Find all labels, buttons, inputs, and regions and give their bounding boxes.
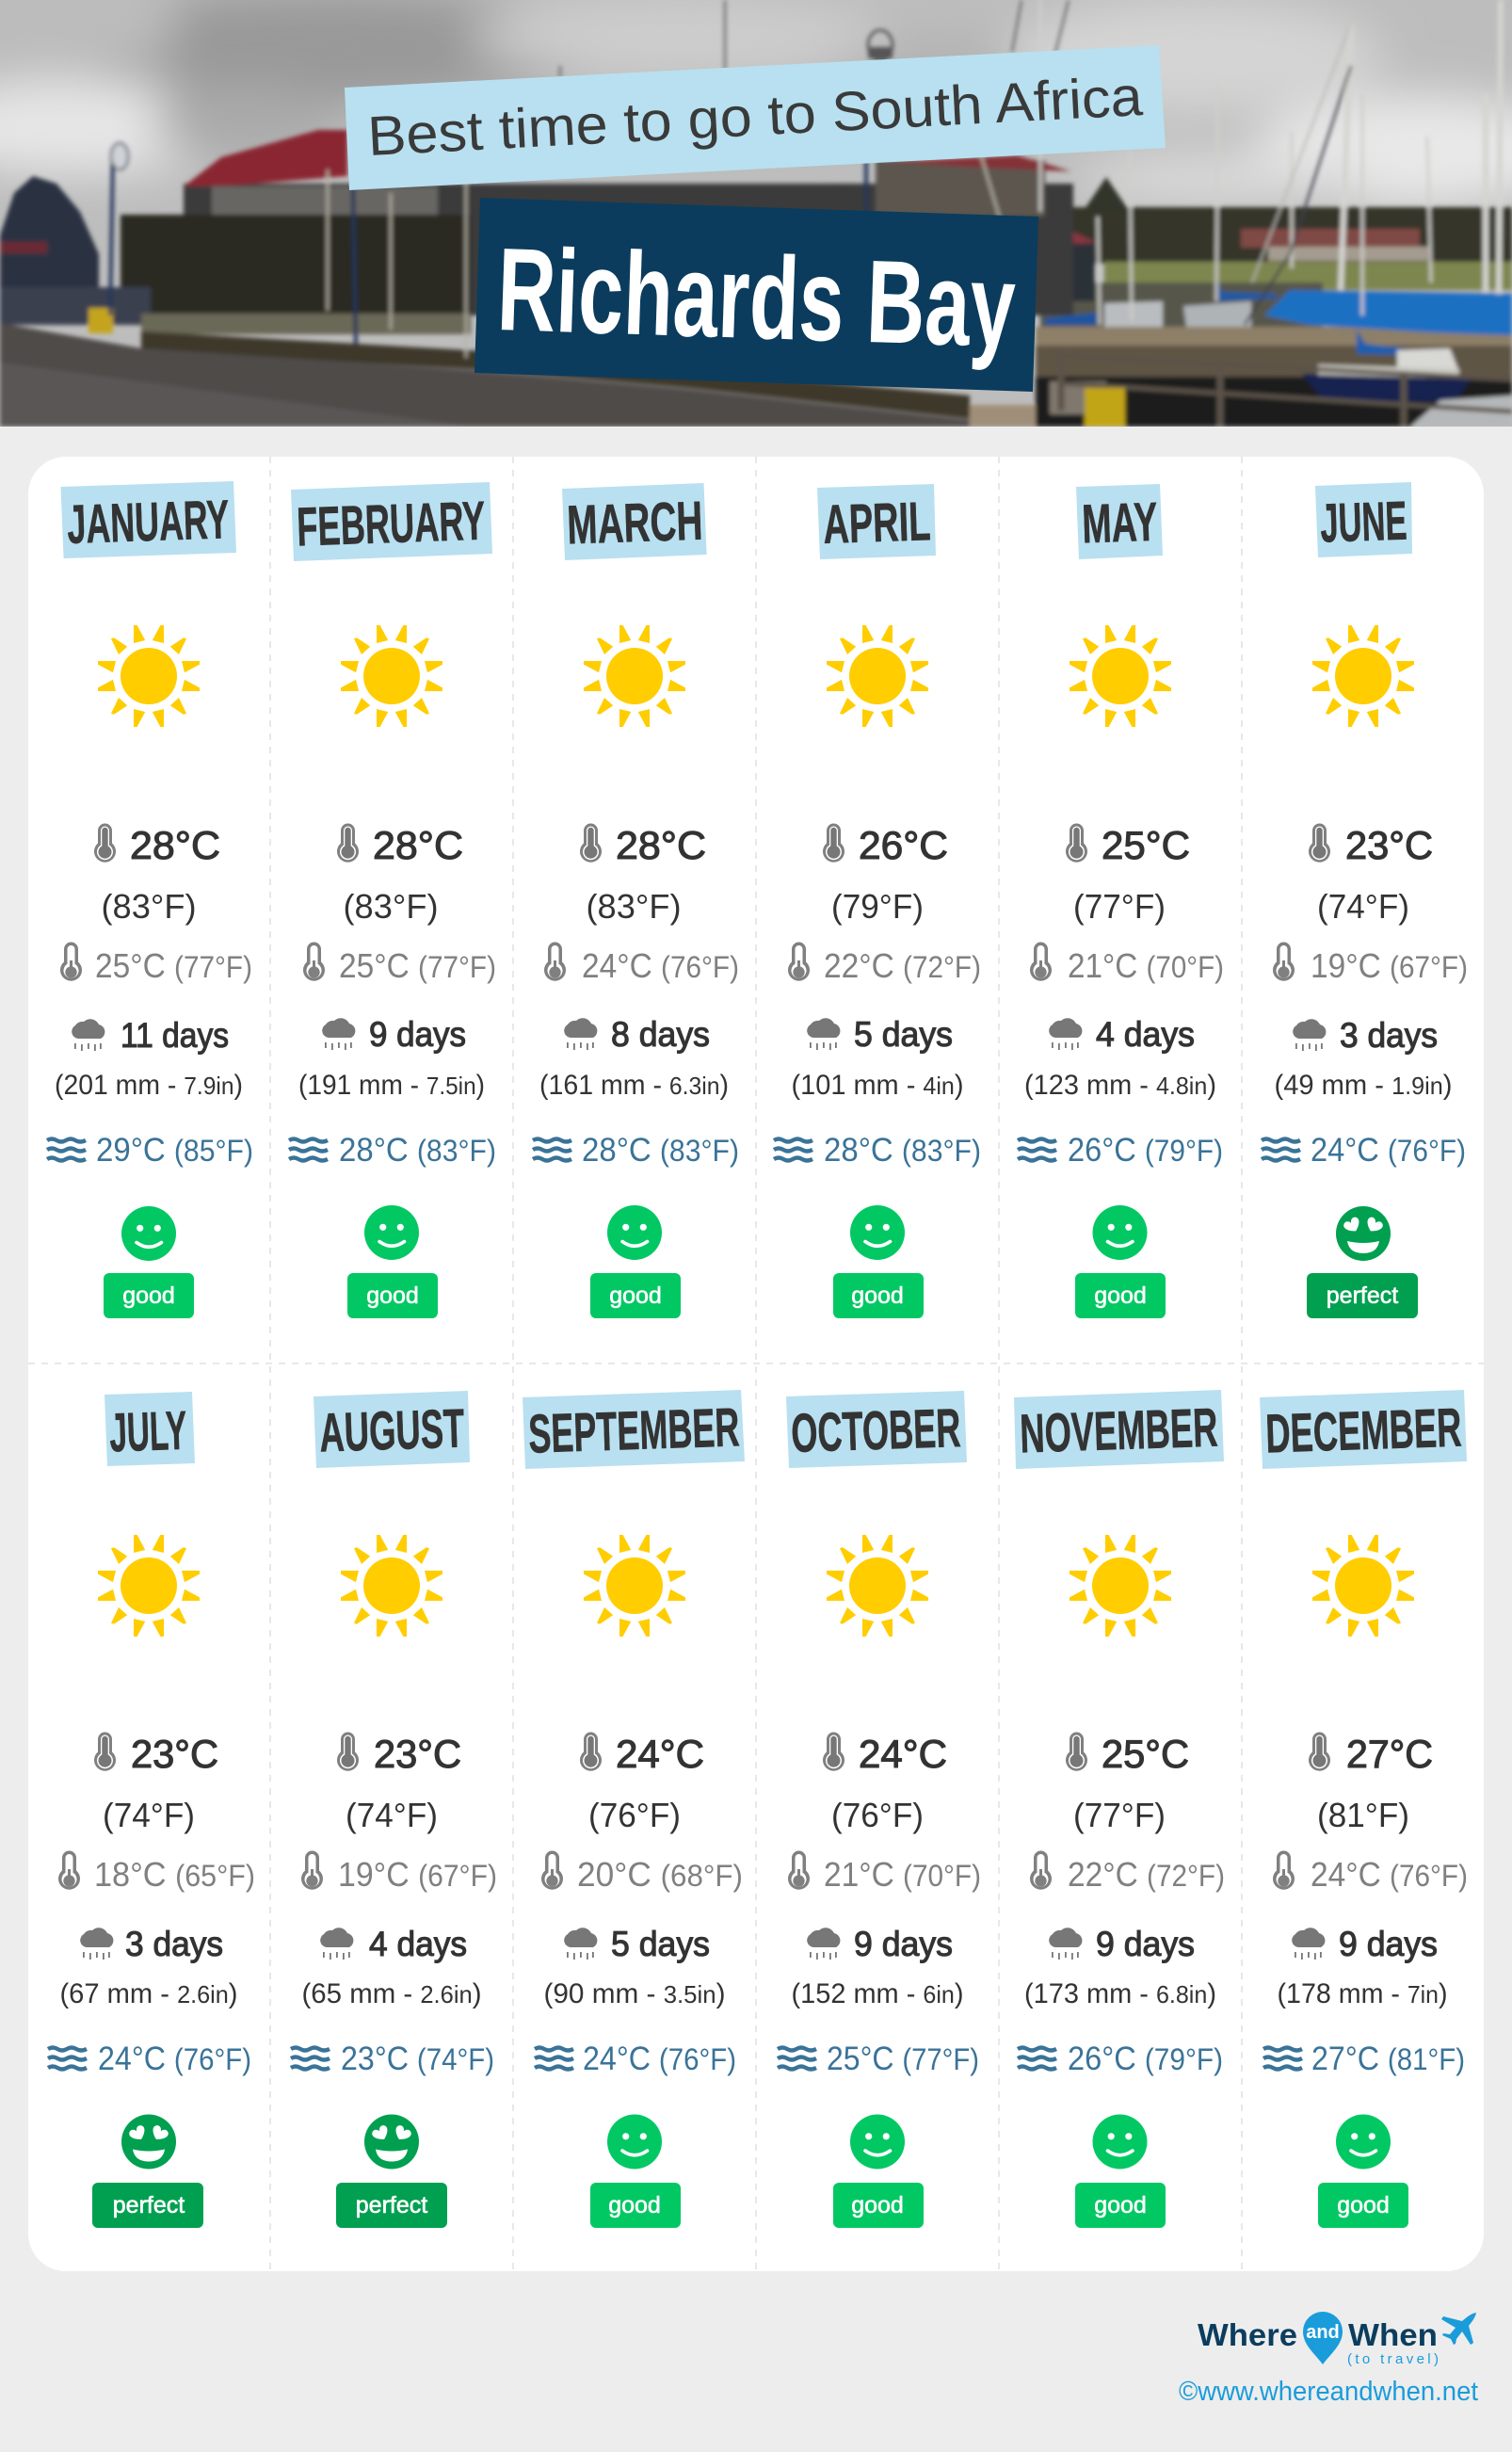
small pavilion <box>1070 243 1098 303</box>
max temperature fahrenheit: (79°F) <box>831 887 924 926</box>
month title <box>786 1391 967 1468</box>
month title: JANUARY <box>66 489 230 556</box>
min temperature: 22°C (72°F) <box>1068 1855 1225 1894</box>
icon: sun <box>584 625 685 727</box>
sea temperature: 24°C (76°F) <box>98 2041 251 2077</box>
fence and walkway <box>141 314 471 334</box>
rating: good: good <box>366 1282 419 1309</box>
sea temperature: 25°C (77°F) <box>827 2041 979 2077</box>
dock railing <box>1061 356 1512 411</box>
rainfall: (67 mm - 2.6in) <box>59 1978 237 2009</box>
rating: perfect: perfect <box>356 2192 427 2218</box>
rating: perfect <box>92 2115 203 2228</box>
yellow bins <box>88 308 113 333</box>
rain days <box>1293 1016 1438 1055</box>
max temperature: 27°C <box>1346 1732 1433 1776</box>
rating: good <box>104 1206 194 1318</box>
max temperature fahrenheit: (74°F) <box>1317 887 1409 926</box>
rating: good: good <box>1094 2192 1147 2218</box>
rain days <box>322 1015 466 1054</box>
rainfall: (49 mm - 1.9in) <box>1275 1070 1452 1101</box>
sea temperature: 27°C (81°F) <box>1311 2041 1465 2077</box>
rain days <box>564 1015 710 1054</box>
month: February <box>289 482 496 1318</box>
max temperature fahrenheit: (83°F) <box>586 887 682 926</box>
rain days <box>1292 1925 1438 1963</box>
hero photo: Richards Bay marina <box>0 0 1512 427</box>
sea temperature: 24°C (76°F) <box>583 2041 736 2077</box>
max temperature fahrenheit: (83°F) <box>102 887 196 926</box>
month: June <box>1262 482 1468 1318</box>
road <box>0 323 970 427</box>
rating: good: good <box>122 1282 175 1309</box>
rating: perfect <box>1307 1206 1418 1318</box>
min temperature: 21°C (70°F) <box>1068 946 1224 985</box>
rating: good <box>833 2115 924 2228</box>
calendar panel <box>28 457 1484 2271</box>
rating: good: good <box>851 2192 904 2218</box>
month title: MARCH <box>566 491 703 556</box>
icon: sun <box>1312 625 1414 727</box>
max temperature fahrenheit: (77°F) <box>1073 887 1166 926</box>
rating: perfect: perfect <box>113 2192 185 2218</box>
icon: sun <box>1070 625 1171 727</box>
max temperature <box>1309 1732 1433 1776</box>
sea temperature: 26°C (79°F) <box>1068 2041 1223 2077</box>
max temperature: 24°C <box>616 1732 704 1776</box>
rain days: 9 days <box>854 1925 953 1963</box>
month title <box>1315 482 1412 557</box>
rain days: 9 days <box>1096 1925 1195 1963</box>
rain days <box>320 1925 467 1963</box>
month title: NOVEMBER <box>1019 1397 1218 1464</box>
rainfall: (191 mm - 7.5in) <box>298 1070 485 1101</box>
distant tree line <box>1045 207 1512 264</box>
max temperature: 28°C <box>130 823 220 867</box>
month: September <box>523 1390 745 2228</box>
month: July <box>48 1392 255 2228</box>
left trees <box>0 176 99 301</box>
rain days: 3 days <box>1340 1016 1438 1055</box>
rating: perfect: perfect <box>1327 1282 1398 1309</box>
logo: Where and When to travel: and <box>1306 2322 1340 2343</box>
logo: Where and When to travel <box>1198 2312 1476 2367</box>
rain days <box>564 1925 710 1963</box>
rain days <box>72 1016 229 1055</box>
copyright url: ©www.whereandwhen.net <box>1179 2377 1478 2407</box>
rain days <box>1049 1925 1195 1963</box>
icon: sun <box>827 1535 928 1637</box>
max temperature: 23°C <box>131 1732 218 1776</box>
icon: sun <box>1070 1535 1171 1637</box>
rating: good <box>833 1205 924 1318</box>
month title <box>817 484 936 559</box>
rain days: 11 days <box>121 1016 229 1055</box>
rainfall: (101 mm - 4in) <box>791 1070 964 1101</box>
min temperature: 19°C (67°F) <box>338 1855 497 1894</box>
max temperature: 23°C <box>1345 823 1433 867</box>
month: May <box>1018 484 1224 1318</box>
month: March <box>533 483 739 1318</box>
month title: SEPTEMBER <box>527 1396 740 1465</box>
rating: good: good <box>609 1282 662 1309</box>
max temperature fahrenheit: (83°F) <box>343 887 439 926</box>
logo: Where and When to travel: Where <box>1198 2317 1297 2352</box>
month: October <box>778 1391 981 2228</box>
month title <box>523 1390 745 1469</box>
max temperature fahrenheit: (81°F) <box>1317 1796 1409 1834</box>
icon: sun <box>584 1535 685 1637</box>
rainfall: (201 mm - 7.9in) <box>55 1070 243 1101</box>
min temperature: 18°C (65°F) <box>94 1855 255 1894</box>
rainfall: (173 mm - 6.8in) <box>1024 1978 1216 2009</box>
subtitle banner: Best time to go to South Africa <box>366 65 1144 168</box>
month title: JULY <box>108 1400 187 1463</box>
min temperature: 25°C (77°F) <box>95 946 252 985</box>
rainfall: (178 mm - 7in) <box>1277 1978 1448 2009</box>
icon: sun <box>1312 1535 1414 1637</box>
month title: FEBRUARY <box>296 491 486 557</box>
sea temperature: 28°C (83°F) <box>582 1132 739 1169</box>
max temperature: 25°C <box>1102 823 1190 867</box>
max temperature fahrenheit: (74°F) <box>103 1796 195 1834</box>
rating: perfect <box>336 2115 447 2228</box>
rainfall: (161 mm - 6.3in) <box>539 1070 729 1101</box>
month title: APRIL <box>822 491 931 556</box>
month title <box>562 483 707 560</box>
building <box>184 184 1073 315</box>
title banner: Richards Bay <box>495 224 1018 372</box>
rating: good: good <box>608 2192 661 2218</box>
max temperature fahrenheit: (76°F) <box>831 1796 924 1834</box>
max temperature fahrenheit: (76°F) <box>588 1796 681 1834</box>
month title <box>291 482 492 561</box>
rain days <box>807 1925 953 1963</box>
month: January <box>47 481 253 1318</box>
sea temperature: 28°C (83°F) <box>339 1132 496 1169</box>
right dock <box>1036 346 1512 383</box>
rain days: 5 days <box>854 1015 953 1054</box>
rainfall: (152 mm - 6in) <box>791 1978 964 2009</box>
rating: good <box>590 2115 681 2228</box>
rain days: 4 days <box>1096 1015 1195 1054</box>
rain days <box>80 1925 223 1963</box>
rain days: 9 days <box>369 1015 466 1054</box>
max temperature: 24°C <box>859 1732 947 1776</box>
rainfall: (65 mm - 2.6in) <box>301 1978 482 2009</box>
month title <box>1076 484 1163 559</box>
month title: OCTOBER <box>790 1397 961 1464</box>
icon: sun <box>341 625 442 727</box>
sea temperature: 26°C (79°F) <box>1068 1132 1223 1169</box>
month title: AUGUST <box>318 1397 465 1464</box>
subtitle banner <box>345 45 1166 190</box>
max temperature: 28°C <box>373 823 463 867</box>
month title <box>60 481 236 558</box>
rain days: 8 days <box>611 1015 710 1054</box>
rating: good <box>1075 2115 1166 2228</box>
rating: good: good <box>1337 2192 1390 2218</box>
rainfall: (123 mm - 4.8in) <box>1024 1070 1216 1101</box>
max temperature: 25°C <box>1102 1732 1189 1776</box>
month: December <box>1260 1390 1468 2228</box>
month: November <box>1014 1390 1225 2228</box>
min temperature: 21°C (70°F) <box>824 1855 981 1894</box>
min temperature: 20°C (68°F) <box>577 1855 743 1894</box>
sea temperature: 29°C (85°F) <box>96 1132 253 1169</box>
sea temperature: 23°C (74°F) <box>341 2041 494 2077</box>
month title <box>105 1392 195 1466</box>
quay wall <box>141 331 970 419</box>
icon: sun <box>341 1535 442 1637</box>
rain days: 9 days <box>1339 1925 1438 1963</box>
min temperature: 22°C (72°F) <box>824 946 981 985</box>
rain days: 4 days <box>369 1925 467 1963</box>
max temperature fahrenheit: (74°F) <box>346 1796 438 1834</box>
sea temperature: 28°C (83°F) <box>824 1132 981 1169</box>
icon: sun <box>98 1535 200 1637</box>
rating: good <box>347 1205 438 1318</box>
max temperature: 23°C <box>374 1732 461 1776</box>
rain days <box>807 1015 953 1054</box>
min temperature: 25°C (77°F) <box>339 946 496 985</box>
rating: good: good <box>851 1282 904 1309</box>
max temperature: 26°C <box>859 823 948 867</box>
min temperature: 24°C (76°F) <box>582 946 739 985</box>
rain days: 5 days <box>611 1925 710 1963</box>
min temperature: 24°C (76°F) <box>1311 1855 1468 1894</box>
logo: Where and When to travel: (to travel) <box>1347 2351 1439 2367</box>
boats <box>1104 301 1163 327</box>
logo: Where and When to travel: When <box>1348 2317 1438 2352</box>
max temperature fahrenheit: (77°F) <box>1073 1796 1166 1834</box>
max temperature: 28°C <box>616 823 706 867</box>
rating: good <box>590 1205 681 1318</box>
rating: good <box>1318 2115 1408 2228</box>
month title <box>1014 1390 1224 1469</box>
icon: sun <box>827 625 928 727</box>
month title: JUNE <box>1319 491 1407 555</box>
rating: good <box>1075 1205 1166 1318</box>
title banner <box>475 198 1038 392</box>
masts <box>1341 0 1501 294</box>
min temperature: 19°C (67°F) <box>1311 946 1468 985</box>
rain days: 3 days <box>125 1925 223 1963</box>
month: August <box>291 1391 497 2228</box>
rating: good: good <box>1094 1282 1147 1309</box>
month title <box>314 1391 470 1468</box>
rain days <box>1049 1015 1195 1054</box>
sea temperature: 24°C (76°F) <box>1311 1132 1466 1169</box>
month title: MAY <box>1081 492 1158 555</box>
rainfall: (90 mm - 3.5in) <box>544 1978 725 2009</box>
month: April <box>774 484 981 1318</box>
icon: sun <box>98 625 200 727</box>
